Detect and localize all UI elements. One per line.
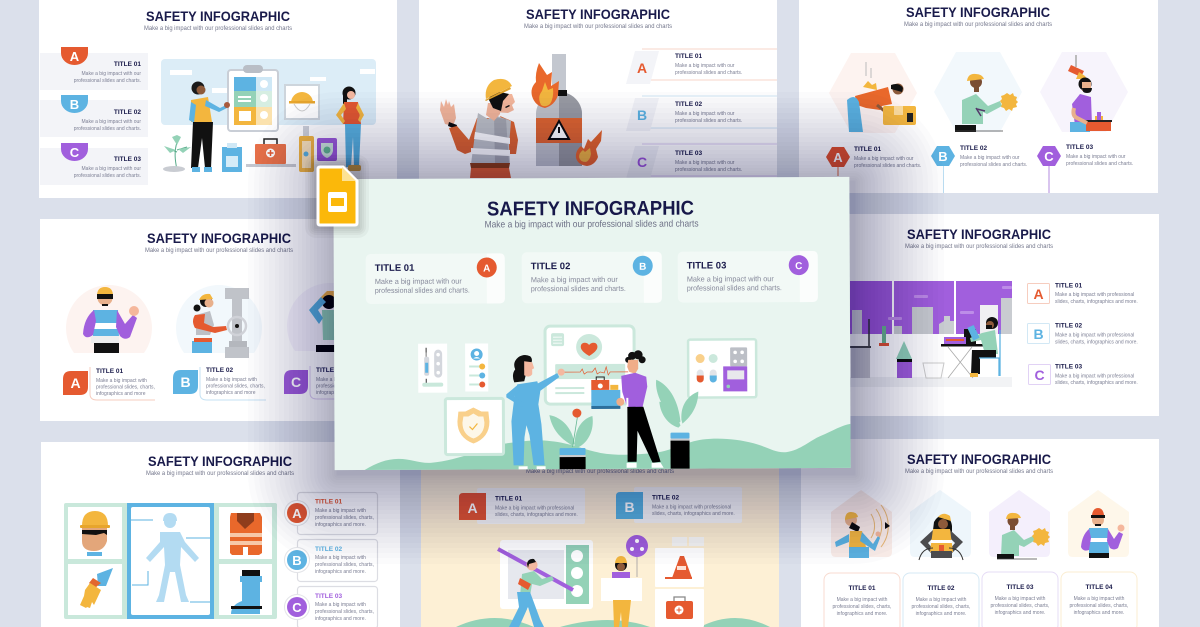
illustration: worker and gas cylinder on fire (440, 54, 602, 178)
panel: slide top center (419, 0, 777, 182)
card: hazard A (826, 53, 921, 176)
badge B (931, 146, 955, 193)
slide title: SAFETY INFOGRAPHIC (907, 226, 1051, 242)
card B (522, 252, 662, 303)
card: supervisor A: TITLE 01 (96, 368, 123, 375)
panel: slide bottom center (421, 460, 779, 627)
card A: professional slides and charts. (375, 286, 470, 295)
list item B: TITLE 02 (1055, 322, 1082, 330)
card: valve worker B: Make a big impact with (206, 377, 257, 383)
list item C: professional slides, charts, (315, 609, 374, 615)
list item B: TITLE 02 (315, 546, 342, 553)
card A (366, 253, 505, 304)
list item C: professional slides and charts. (675, 167, 742, 173)
slide title: SAFETY INFOGRAPHIC (148, 453, 292, 469)
diagram: protective equipment (64, 503, 277, 619)
plant right (656, 380, 699, 469)
list item B: professional slides and charts. (675, 118, 742, 124)
list item B (40, 95, 148, 137)
slide title: SAFETY INFOGRAPHIC (906, 4, 1050, 20)
list item A: Make a big impact with professional (1055, 292, 1134, 298)
list item C: TITLE 03 (315, 593, 342, 600)
card B: professional slides and charts. (531, 284, 626, 293)
list item A: A (637, 60, 647, 76)
panel: slide top left (39, 0, 397, 198)
list item A: professional slides and charts. (675, 70, 742, 76)
panel: slide middle right (800, 214, 1159, 416)
woman in blue jumpsuit (506, 355, 565, 469)
list item A (459, 488, 585, 524)
card C (678, 251, 818, 303)
icon: work glove (80, 568, 113, 608)
list item B: TITLE 02 (675, 101, 702, 108)
list item B: B (1033, 326, 1044, 342)
list item B: Make a big impact with professional (1055, 332, 1134, 338)
card B: Make a big impact with our (531, 275, 618, 284)
badge B: B (938, 149, 948, 164)
card: hazard B (931, 52, 1027, 193)
main subtitle: Make a big impact with our professional slides and charts (485, 219, 699, 230)
card: supervisor A: infographics and more (96, 391, 146, 397)
card text 2 (903, 573, 979, 627)
list item B: professional slides, charts, (315, 562, 374, 568)
list item A: TITLE 01 (675, 53, 702, 60)
card: hazard C: Make a big impact with our (1066, 154, 1126, 160)
list item B: B (637, 107, 647, 123)
list item A: A (1033, 286, 1044, 302)
card text 3: TITLE 03 (1006, 584, 1034, 591)
card C: TITLE 03 (687, 260, 726, 272)
badge A: A (833, 150, 843, 165)
card text 2: infographics and more. (916, 611, 966, 617)
list item A: professional slides and charts. (74, 78, 141, 84)
list item B (616, 487, 742, 523)
monitor with heart and ECG (545, 326, 634, 404)
list item C (626, 144, 777, 179)
card A: A (483, 263, 490, 274)
panel: slide top right (799, 0, 1158, 193)
list item A (284, 492, 378, 534)
badge B: B (180, 374, 191, 390)
card B: TITLE 02 (531, 261, 570, 272)
card: supervisor A (63, 285, 155, 400)
list item C: professional slides and charts. (74, 173, 141, 179)
list item C: slides, charts, infographics and more. (1055, 380, 1138, 386)
card: hazard A: TITLE 01 (854, 146, 881, 153)
card: hazard A: Make a big impact with our (854, 156, 914, 162)
list item A: Make a big impact with our (675, 63, 735, 69)
list item C (284, 586, 378, 627)
card: syringe (418, 344, 447, 393)
card text 1: TITLE 01 (848, 585, 876, 592)
card: worker 4 (1061, 490, 1137, 627)
slide subtitle: Make a big impact with our professional slides and charts (144, 25, 293, 32)
badge A: A (70, 375, 81, 391)
slide title: SAFETY INFOGRAPHIC (907, 451, 1051, 467)
card text 4 (1061, 572, 1137, 627)
list item C: C (292, 600, 302, 615)
slide subtitle: Make a big impact with our professional slides and charts (905, 243, 1054, 250)
list item B (284, 540, 378, 582)
list item C: Make a big impact with (315, 602, 366, 608)
list item A (626, 49, 777, 84)
list item B: infographics and more. (315, 569, 366, 575)
list item B: Make a big impact with our (82, 119, 141, 125)
slide subtitle: Make a big impact with our professional slides and charts (146, 470, 295, 477)
card: supervisor A: professional slides, charts, (96, 384, 155, 390)
card text 2: professional slides, charts, (912, 604, 970, 610)
card: hazard B: professional slides and charts. (960, 162, 1027, 168)
card text 1 (824, 573, 900, 627)
slide subtitle: Make a big impact with our professional slides and charts (524, 23, 673, 30)
illustration: workers with checklist and safety kit (161, 59, 376, 172)
list item C (40, 143, 148, 185)
card: worker 1 (824, 490, 900, 627)
list item C: infographics and more. (315, 616, 366, 622)
panel: slide bottom left (41, 442, 400, 627)
slide subtitle: Make a big impact with our professional slides and charts (905, 468, 1054, 475)
card A: Make a big impact with our (375, 277, 462, 286)
card: hazard B: Make a big impact with our (960, 155, 1020, 161)
icon: helmet head (80, 511, 110, 556)
slide subtitle: Make a big impact with our professional slides and charts (145, 247, 294, 254)
list item B: B (624, 499, 635, 515)
card text 2: TITLE 02 (927, 585, 955, 592)
card: helmet worker C: infographics (316, 390, 343, 396)
slide title: SAFETY INFOGRAPHIC (147, 230, 291, 246)
list item A: TITLE 01 (315, 498, 342, 506)
list item A: Make a big impact with our (82, 71, 141, 77)
card C: C (795, 261, 802, 272)
list item B: Make a big impact with professional (652, 504, 731, 510)
card: valve worker B: professional slides, charts, (206, 384, 265, 390)
list item A: TITLE 01 (495, 496, 522, 502)
illustration: office worker at desk with city windows (850, 281, 1012, 387)
list item B (1028, 322, 1138, 346)
illustration: workers with window, cone and kit (456, 535, 770, 627)
card: supervisor A: Make a big impact with (96, 378, 147, 384)
list item A: professional slides, charts, (315, 515, 374, 521)
list item A: Make a big impact with (315, 508, 366, 514)
card: hazard A: professional slides and charts. (854, 163, 921, 169)
man in purple sweater with medical kit (591, 350, 664, 468)
card B: B (639, 262, 646, 273)
list item C: Make a big impact with our (82, 166, 141, 172)
card: helmet worker C: Make a big (316, 377, 341, 383)
badge C (1037, 146, 1061, 193)
card text 3: infographics and more. (995, 610, 1045, 616)
list item B (626, 96, 777, 131)
card: helmet worker C: TITLE 03 (316, 367, 343, 374)
slide title: SAFETY INFOGRAPHIC (526, 6, 670, 22)
card text 3: professional slides, charts, (991, 603, 1049, 609)
card text 3: Make a big impact with (995, 596, 1046, 602)
card A: TITLE 01 (375, 263, 415, 274)
list item B: Make a big impact with our (675, 111, 735, 117)
list item B: TITLE 02 (652, 494, 679, 502)
list item C: Make a big impact with our (675, 160, 735, 166)
icon: Google Slides logo (318, 167, 357, 225)
list item B: Make a big impact with (315, 555, 366, 561)
card: hazard B: TITLE 02 (960, 145, 987, 152)
card text 4: TITLE 04 (1085, 584, 1113, 591)
plant left (549, 408, 593, 469)
list item B: TITLE 02 (114, 109, 141, 116)
card text 2: Make a big impact with (916, 597, 967, 603)
list item B: slides, charts, infographics and more. (652, 511, 735, 517)
card: helmet worker C (284, 283, 373, 399)
slide subtitle: Make a big impact with our professional slides and charts (526, 468, 675, 475)
list item B: professional slides and charts. (74, 126, 141, 132)
list item A: slides, charts, infographics and more. (1055, 299, 1138, 305)
list item A: TITLE 01 (114, 61, 141, 68)
list item A (40, 47, 148, 90)
panel: slide middle left (40, 219, 373, 421)
card C: professional slides and charts. (687, 283, 782, 293)
list item A: infographics and more. (315, 522, 366, 528)
card: valve worker B: TITLE 02 (206, 367, 233, 374)
list item A: A (467, 500, 478, 516)
wave ground (364, 424, 851, 470)
list item A: slides, charts, infographics and more. (495, 512, 578, 518)
illustration: medical safety scene (364, 325, 851, 470)
card text 4: professional slides, charts, (1070, 603, 1128, 609)
icon: safety boot (231, 570, 262, 614)
list item C (1028, 364, 1138, 386)
panel: main featured slide (333, 177, 851, 470)
card: helmet worker C: professional (316, 384, 343, 390)
badge C: C (291, 374, 301, 390)
icon: safety vest (230, 513, 262, 555)
main title: SAFETY INFOGRAPHIC (487, 198, 694, 220)
list item C: C (70, 145, 80, 160)
list item C: C (1034, 367, 1045, 383)
panel: slide bottom right (801, 439, 1159, 627)
card: valve worker B: infographics and more (206, 390, 256, 396)
list item C: TITLE 03 (675, 150, 702, 157)
list item B: B (70, 97, 79, 112)
card: worker 3 (982, 490, 1058, 627)
card C: Make a big impact with our (687, 274, 774, 284)
list item B: slides, charts, infographics and more. (1055, 340, 1138, 346)
list item A: Make a big impact with professional (495, 506, 574, 512)
card: valve worker B (173, 285, 266, 400)
list item A (1028, 282, 1138, 305)
silhouette: worker with callout arrows (130, 513, 210, 602)
card text 3 (982, 572, 1058, 627)
card text 1: infographics and more. (837, 611, 887, 617)
card text 1: professional slides, charts, (833, 604, 891, 610)
slide subtitle: Make a big impact with our professional slides and charts (904, 21, 1053, 28)
list item C: Make a big impact with professional (1055, 374, 1134, 380)
card: hazard C (1037, 52, 1133, 193)
card: shield (445, 398, 504, 455)
card: pills and medicine (688, 339, 756, 398)
slide title: SAFETY INFOGRAPHIC (146, 8, 290, 24)
card: hazard C: TITLE 03 (1066, 144, 1093, 151)
card: checklist (465, 343, 488, 392)
list item B: B (292, 553, 302, 568)
card text 4: Make a big impact with (1074, 596, 1125, 602)
card text 1: Make a big impact with (837, 597, 888, 603)
list item C: TITLE 03 (1055, 364, 1082, 370)
list item C: C (637, 154, 647, 170)
list item C: TITLE 03 (114, 156, 141, 163)
list item A: TITLE 01 (1055, 282, 1082, 290)
list item A: A (70, 49, 80, 64)
card: hazard C: professional slides and charts. (1066, 161, 1133, 167)
list item A: A (292, 506, 302, 521)
badge C: C (1044, 149, 1054, 164)
card text 4: infographics and more. (1074, 610, 1124, 616)
card: worker 2 (903, 490, 979, 627)
